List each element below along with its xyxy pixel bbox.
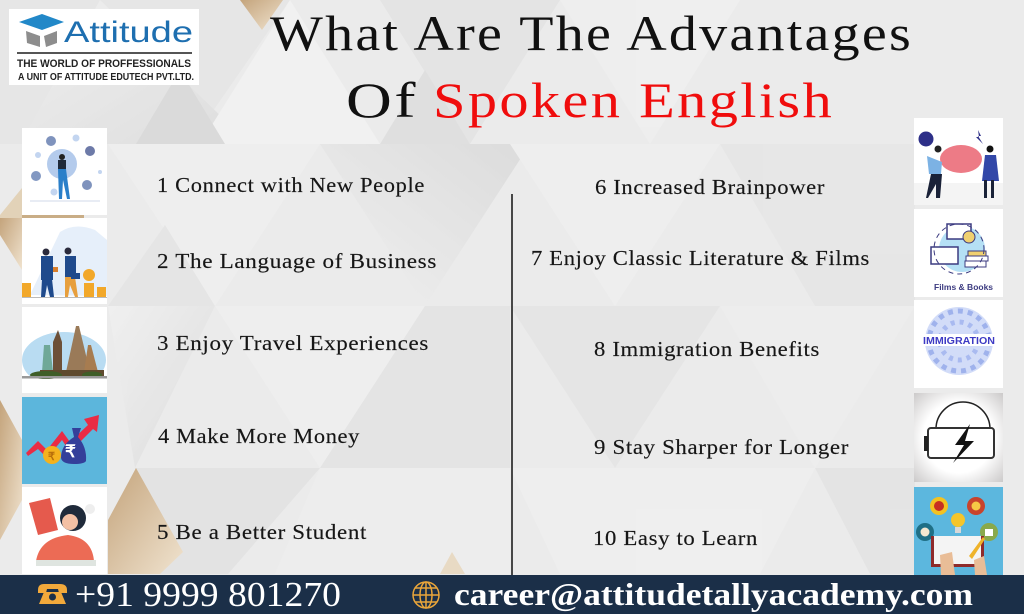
divider line between columns [511,194,513,575]
item 4: 4 Make More Money [158,424,360,448]
item 3: 3 Enjoy Travel Experiences [157,331,429,355]
email address: career@attitudetallyacademy.com [454,576,973,612]
item 10: 10 Easy to Learn [593,526,758,550]
icon: globe [413,582,439,608]
icon: immigration badge [914,300,1003,388]
icon: money bag and growth arrow [22,397,107,484]
right list [531,175,870,550]
gold accents [240,0,283,30]
icon: open book and ideas [914,487,1003,575]
icon: films and books [914,209,1003,297]
title: Of [346,72,418,128]
icon: business handshake [22,218,107,304]
item 7: 7 Enjoy Classic Literature & Films [531,246,870,270]
icon caption: Films & Books [934,282,993,292]
icon caption: IMMIGRATION [923,336,995,347]
icon: money bag and growth arrow: ₹ [65,442,76,461]
icon: telephone [38,584,67,604]
icon: battery with lightning [914,393,1003,482]
left list [157,173,437,544]
icon: money bag and growth arrow: ₹ [48,451,55,463]
item 8: 8 Immigration Benefits [594,337,820,361]
item 2: 2 The Language of Business [157,249,437,273]
title: What Are The Advantages [270,5,913,61]
logo wordmark: Attitude [64,16,193,49]
icon: person with globe and contacts [22,128,107,215]
logo subline: A UNIT OF ATTITUDE EDUTECH PVT.LTD. [18,72,194,83]
footer bar [0,575,1024,614]
icon: student reading [22,487,107,574]
item 1: 1 Connect with New People [157,173,425,197]
title [270,5,913,128]
icon: graduation cap [19,14,64,47]
title: Spoken English [433,72,834,128]
phone number: +91 9999 801270 [75,575,341,614]
item 6: 6 Increased Brainpower [595,175,825,199]
icon: world landmarks [22,307,107,393]
item 5: 5 Be a Better Student [157,520,367,544]
item 9: 9 Stay Sharper for Longer [594,435,849,459]
logo tagline: THE WORLD OF PROFFESSIONALS [17,58,191,70]
logo [9,9,199,85]
icon: brain and people [914,118,1003,205]
